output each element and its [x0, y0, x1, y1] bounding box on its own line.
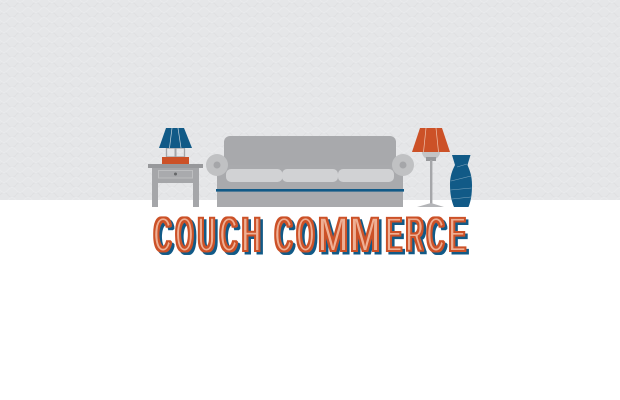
patterned wall background: [0, 0, 620, 200]
title: Couch Commerce: C: [275, 209, 292, 262]
title: Couch Commerce: M: [350, 209, 380, 262]
title: Couch Commerce: U: [198, 209, 215, 262]
title: Couch Commerce: O: [297, 209, 314, 262]
title: Couch Commerce: E: [449, 209, 466, 262]
title: Couch Commerce: C: [427, 209, 444, 262]
title: Couch Commerce: H: [242, 209, 260, 262]
title: Couch Commerce: R: [406, 209, 424, 262]
title: Couch Commerce: C: [154, 209, 171, 262]
icon: blue vase: [450, 155, 472, 207]
icon: side table: [148, 164, 203, 207]
title: Couch Commerce: O: [176, 209, 193, 262]
icon: floor lamp: [412, 128, 450, 207]
title: Couch Commerce: C: [220, 209, 237, 262]
icon: table lamp on book: [159, 128, 192, 164]
title: Couch Commerce: E: [386, 209, 402, 262]
title: Couch Commerce: M: [318, 209, 348, 262]
icon: sofa: [206, 136, 414, 207]
